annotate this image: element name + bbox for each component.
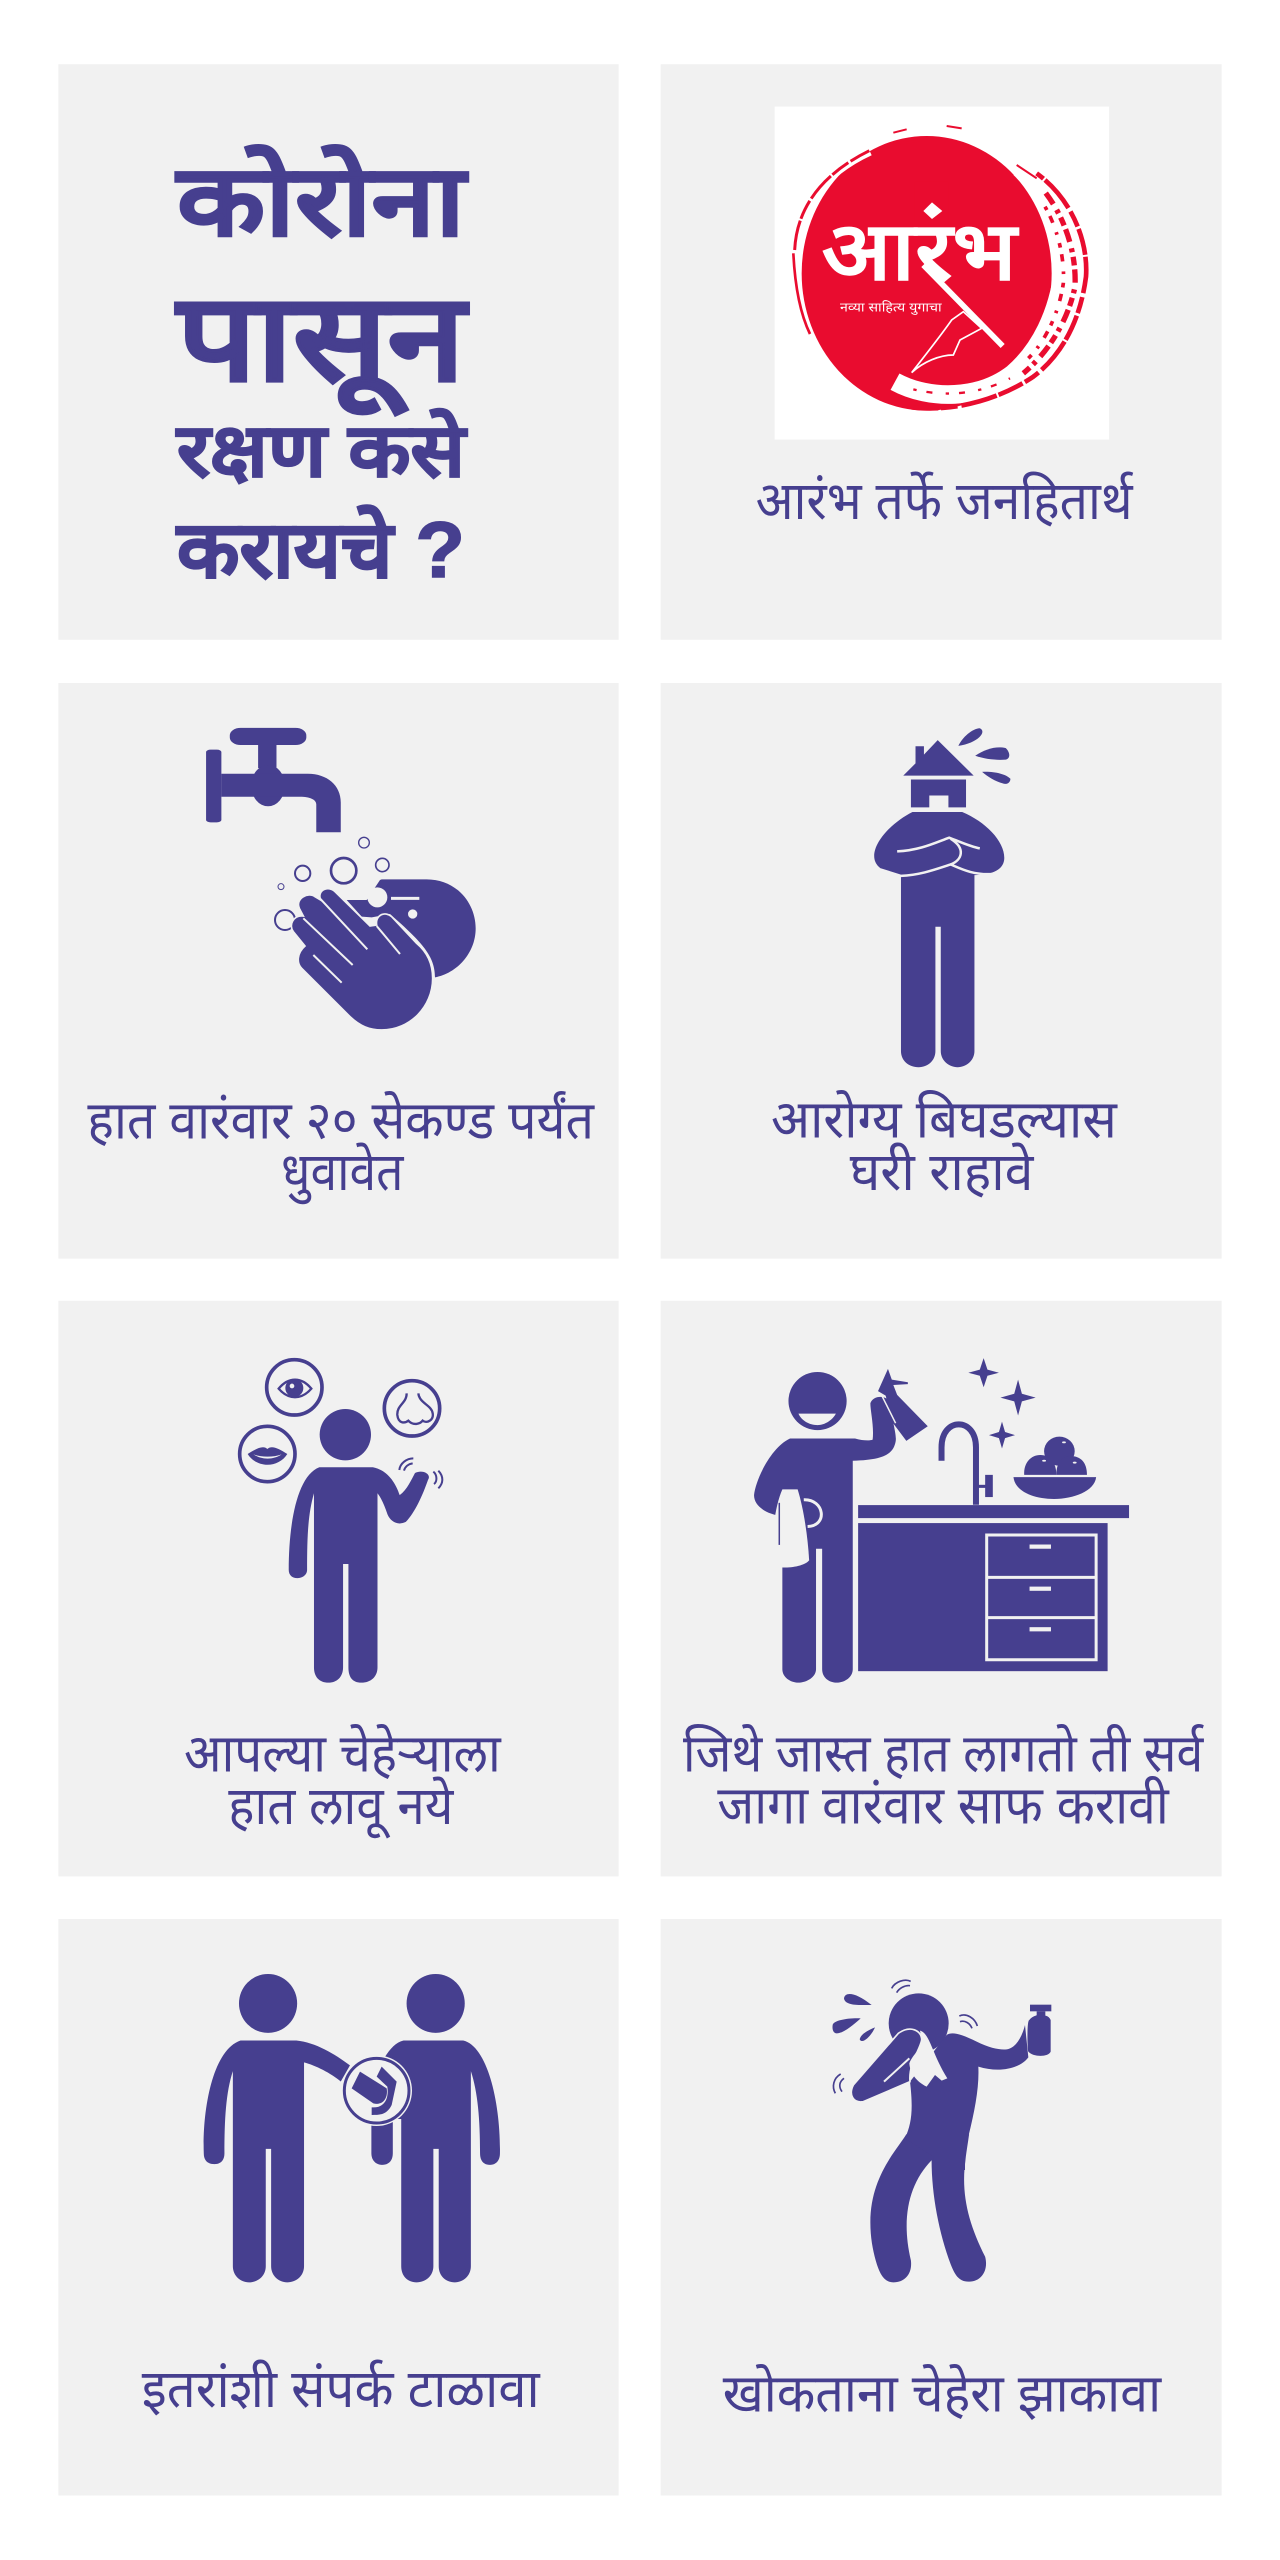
logo: आरंभ	[822, 206, 1020, 297]
icon: house-head person	[874, 728, 1010, 1067]
caption: do not touch face: हात लावू नये	[228, 1776, 454, 1839]
panel: cover face when coughing	[661, 1919, 1222, 2496]
title text: रक्षण कसे	[175, 408, 468, 492]
panel: clean surfaces	[661, 1301, 1222, 1876]
caption: stay home: आरोग्य बिघडल्यास	[771, 1089, 1118, 1149]
icon: person and face parts	[240, 1360, 442, 1683]
caption: wash hands: हात वारंवार २० सेकण्ड पर्यंत	[87, 1090, 595, 1150]
caption: do not touch face: आपल्या चेहेऱ्याला	[184, 1723, 502, 1783]
title text: पासून	[175, 270, 470, 417]
title text	[175, 144, 470, 594]
caption: stay home: घरी राहावे	[850, 1142, 1035, 1202]
caption: wash hands	[87, 1090, 595, 1205]
caption: avoid contact: इतरांशी संपर्क टाळावा	[142, 2359, 541, 2419]
panel: Aarambh logo	[661, 64, 1222, 640]
panel: avoid contact	[58, 1919, 619, 2496]
title text: कोरोना	[175, 144, 469, 256]
caption: clean surfaces: जिथे जास्त हात लागतो ती सर्व	[683, 1723, 1205, 1783]
caption: do not touch face	[184, 1723, 502, 1839]
logo: नव्या साहित्य युगाचा	[840, 299, 942, 315]
caption: public interest: आरंभ तर्फे जनहितार्थ	[756, 471, 1134, 531]
panel: wash hands	[58, 683, 619, 1259]
icon: person cleaning kitchen	[754, 1358, 1129, 1683]
icon: soapy hands	[275, 837, 476, 1030]
caption: wash hands: धुवावेत	[281, 1142, 404, 1205]
caption: stay home	[771, 1089, 1118, 1202]
caption: clean surfaces	[683, 1723, 1205, 1836]
icon: two people no handshake	[204, 1974, 500, 2282]
panel: stay home	[661, 683, 1222, 1259]
icon: person sneezing	[832, 1980, 1051, 2282]
caption: cover face: खोकताना चेहेरा झाकावा	[723, 2364, 1162, 2424]
caption: clean surfaces: जागा वारंवार साफ करावी	[717, 1776, 1170, 1836]
panel: title	[58, 64, 619, 640]
icon: faucet	[206, 728, 341, 832]
logo	[775, 107, 1109, 440]
panel: do not touch face	[58, 1301, 619, 1876]
title text: करायचे ?	[175, 504, 465, 594]
